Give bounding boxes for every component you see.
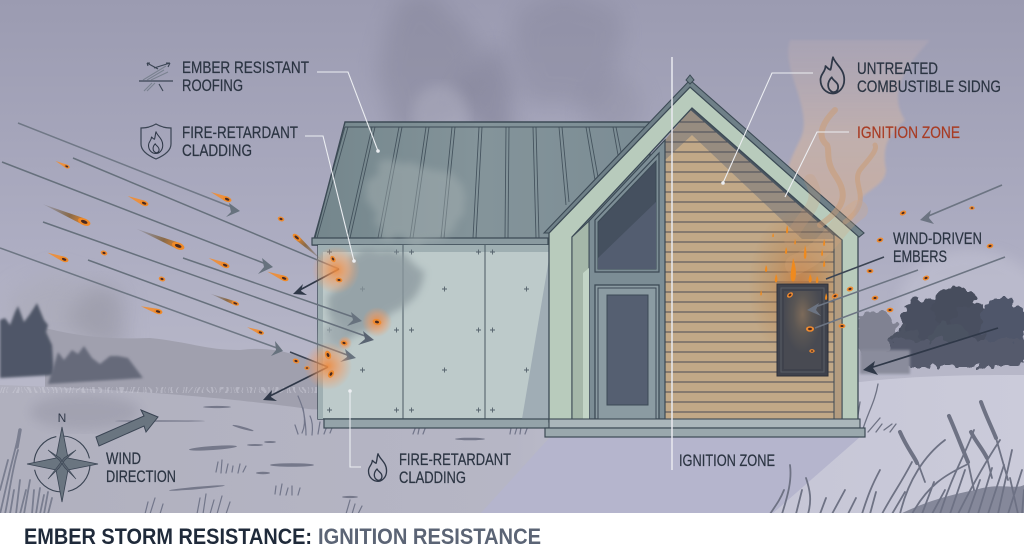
flames on siding <box>760 225 827 300</box>
icon: shield with flame <box>141 124 171 159</box>
grass base mass right <box>900 485 1024 514</box>
arrows: wind-driven embers from left <box>0 123 368 397</box>
entry door <box>595 285 659 419</box>
compass rose: N <box>58 411 66 425</box>
wind-driven embers leader <box>826 257 884 279</box>
background smoke clouds <box>5 0 1024 355</box>
siding window <box>777 284 828 376</box>
right foreground grass <box>770 384 1024 514</box>
leader lines <box>305 72 849 467</box>
ground <box>0 375 1024 514</box>
icon: flame for untreated siding <box>820 57 844 94</box>
scorch on siding <box>748 207 852 363</box>
compass rose <box>27 411 98 502</box>
triangular window <box>595 153 659 272</box>
window and door bay <box>589 140 665 419</box>
ember impact glows on wall <box>304 246 392 390</box>
label: fire-retardant cladding lower: FIRE-RETARDANT <box>399 451 511 469</box>
title: IGNITION RESISTANCE <box>318 524 541 549</box>
label: untreated combustible siding: UNTREATED <box>857 60 938 78</box>
label: wind-driven embers: EMBERS <box>893 248 947 266</box>
siding boards <box>665 122 835 412</box>
ignition zone divider line <box>671 57 673 470</box>
panel screws <box>327 250 529 412</box>
entry step <box>545 419 865 437</box>
label: ember resistant roofing: EMBER RESISTANT <box>182 59 309 77</box>
arrowheads <box>226 203 374 401</box>
label: ember resistant roofing: ROOFING <box>182 77 243 95</box>
frosted grass bands <box>0 372 1024 495</box>
ground dark patches <box>115 406 485 498</box>
label: fire-retardant cladding upper: CLADDING <box>182 142 252 160</box>
right side arrows <box>807 185 1005 375</box>
pathway <box>480 437 860 514</box>
flying embers <box>41 160 994 379</box>
title: EMBER STORM RESISTANCE: <box>24 524 312 549</box>
house: roof panel <box>312 122 650 245</box>
label: fire-retardant cladding lower: CLADDING <box>399 469 466 487</box>
orange smoke plume behind gable <box>784 40 930 240</box>
icon: ember resistant roofing <box>139 63 173 91</box>
smoke over roof and wall <box>318 164 465 357</box>
trees right <box>854 286 1024 367</box>
left foreground grass <box>0 430 52 514</box>
gable trim <box>544 75 864 422</box>
wind direction arrow <box>96 410 158 446</box>
title band <box>0 513 1024 559</box>
house: gable siding <box>665 108 841 419</box>
label: wind-driven embers: WIND-DRIVEN <box>893 230 982 248</box>
house: fire-retardant wall panels <box>318 245 550 428</box>
label: ignition zone lower: IGNITION ZONE <box>679 452 775 470</box>
grass tufts <box>145 396 528 514</box>
trees left <box>0 303 143 384</box>
gable plume swirls <box>790 110 876 265</box>
far right mist <box>860 350 910 374</box>
label: wind direction: DIRECTION <box>106 468 176 486</box>
label: ignition zone red: IGNITION ZONE <box>857 124 960 142</box>
icon: flame for lower cladding <box>368 454 387 481</box>
distant hill <box>45 328 330 410</box>
label: fire-retardant cladding upper: FIRE-RETARDANT <box>182 124 298 142</box>
label: wind direction: WIND <box>106 450 141 468</box>
